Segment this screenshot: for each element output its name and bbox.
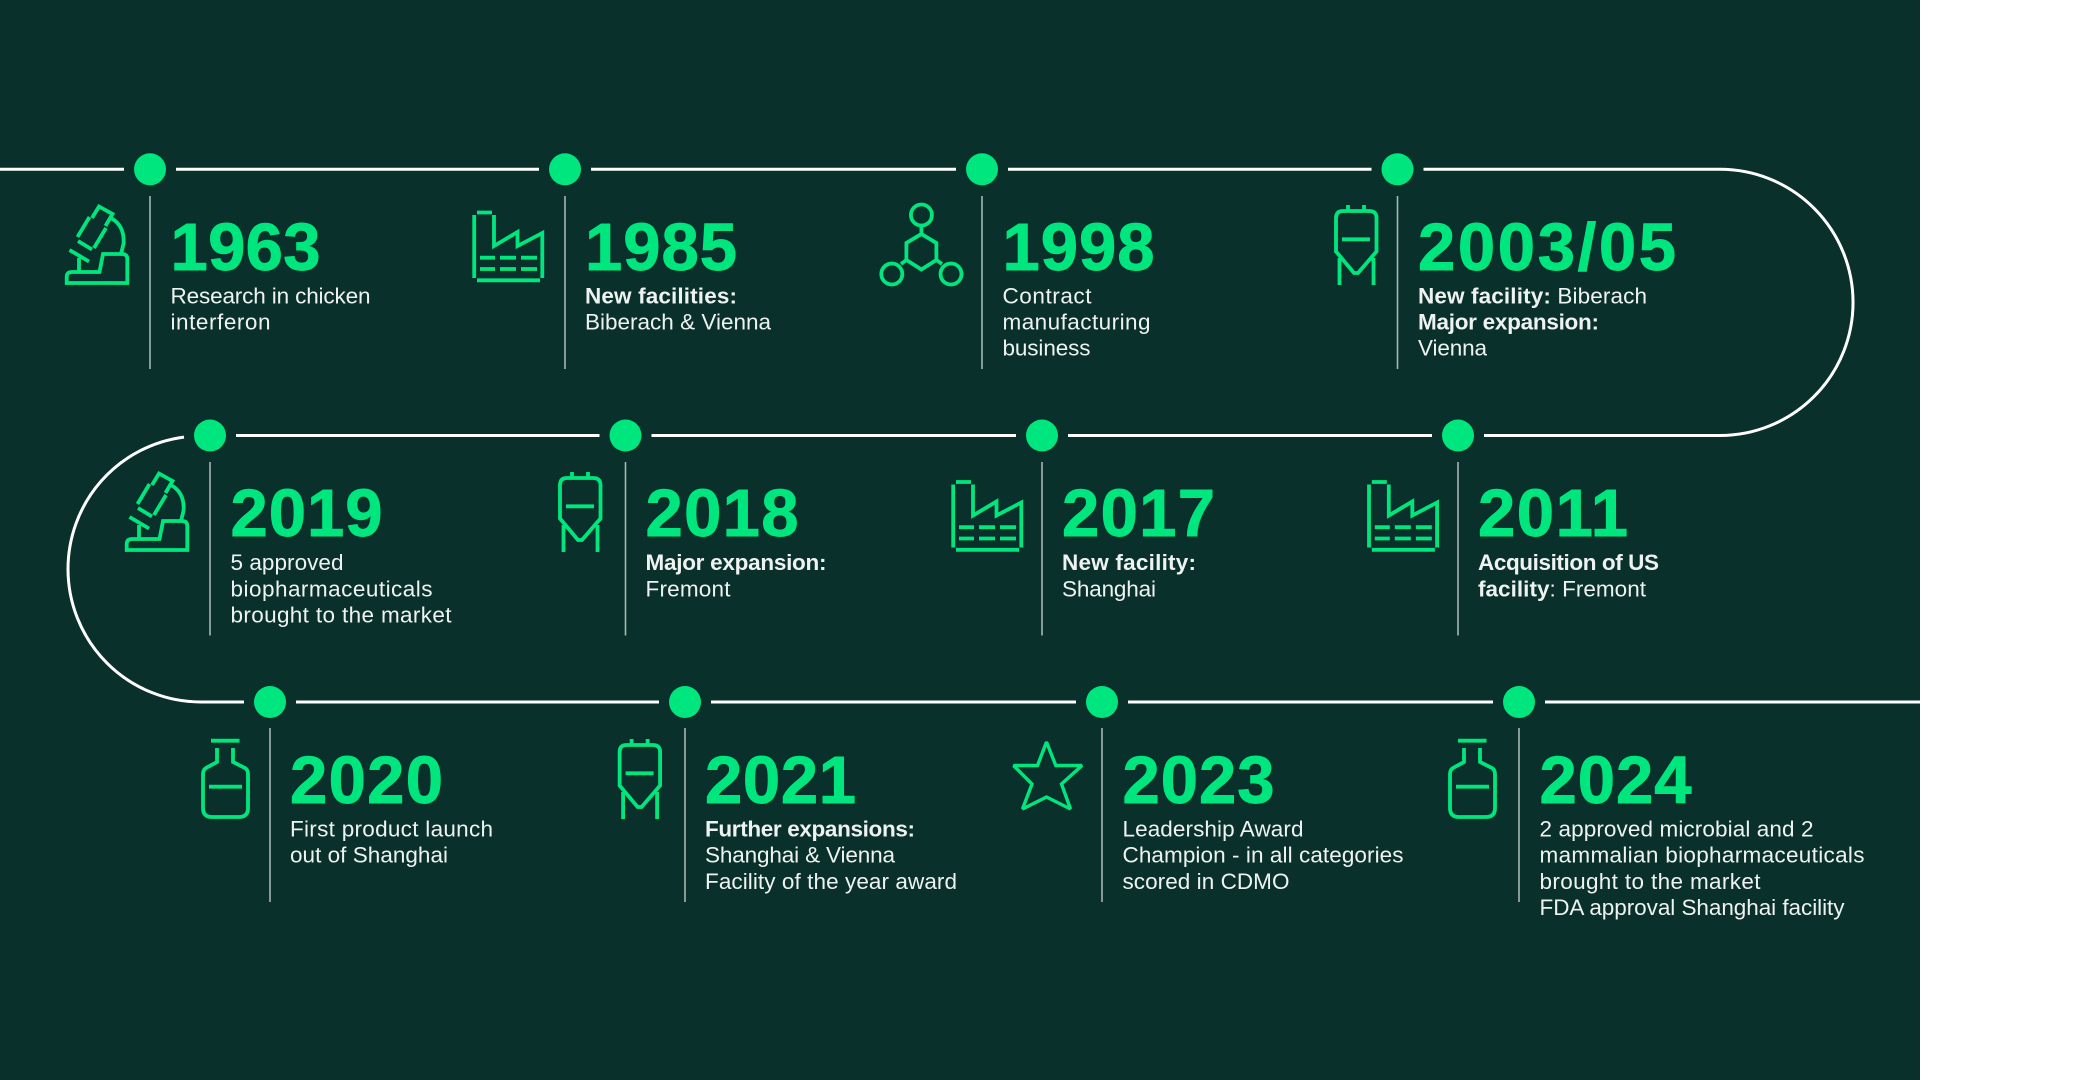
year: 1998 bbox=[1002, 210, 1154, 285]
description bbox=[170, 283, 370, 334]
year: 2003/05 bbox=[1418, 210, 1676, 285]
year: 1963 bbox=[170, 210, 320, 285]
year: 1985 bbox=[585, 210, 737, 285]
description: Shanghai bbox=[1062, 576, 1156, 601]
description: Vienna bbox=[1418, 336, 1487, 361]
description: New facility: Biberach bbox=[1418, 283, 1647, 308]
description: Champion - in all categories bbox=[1122, 843, 1404, 868]
description: Research in chicken bbox=[170, 283, 370, 308]
description: New facilities: bbox=[585, 283, 737, 308]
description bbox=[646, 550, 826, 601]
icon: microscope bbox=[127, 474, 187, 550]
year: 2018 bbox=[646, 476, 798, 551]
milestone 2011 bbox=[1369, 420, 1659, 636]
milestone 1963 bbox=[67, 153, 370, 369]
marker dot bbox=[1382, 153, 1414, 185]
description: brought to the market bbox=[1540, 869, 1761, 894]
divider bbox=[1396, 196, 1398, 369]
icon: factory bbox=[953, 482, 1021, 550]
year: 2020 bbox=[290, 743, 443, 818]
description: Acquisition of US bbox=[1478, 550, 1659, 575]
milestone 1985 bbox=[474, 153, 771, 369]
serpentine timeline path bbox=[0, 169, 1920, 702]
description: brought to the market bbox=[230, 602, 452, 628]
description: Shanghai & Vienna bbox=[705, 843, 895, 868]
divider bbox=[624, 462, 626, 636]
milestone 2017 bbox=[953, 420, 1215, 636]
description: Contract bbox=[1002, 283, 1092, 308]
marker dot bbox=[194, 420, 226, 452]
icon: bottle bbox=[203, 741, 248, 817]
marker dot bbox=[1026, 420, 1058, 452]
milestone 1998 bbox=[881, 153, 1154, 369]
divider bbox=[1457, 462, 1459, 636]
description bbox=[290, 816, 493, 868]
icon: tank bbox=[620, 739, 660, 819]
divider bbox=[1518, 728, 1520, 902]
milestone 2019 bbox=[127, 420, 452, 636]
year: 2024 bbox=[1540, 743, 1692, 818]
milestone 2021 bbox=[620, 686, 957, 902]
year: 2011 bbox=[1478, 476, 1628, 551]
year: 2021 bbox=[705, 743, 856, 818]
description: New facility: bbox=[1062, 550, 1196, 575]
marker dot bbox=[1503, 686, 1535, 718]
description: business bbox=[1002, 336, 1090, 361]
description: Further expansions: bbox=[705, 816, 915, 842]
divider bbox=[564, 196, 566, 369]
icon: star bbox=[1014, 742, 1082, 809]
icon: bottle bbox=[1450, 741, 1495, 817]
marker dot bbox=[254, 686, 286, 718]
description: 5 approved bbox=[230, 550, 344, 575]
divider bbox=[981, 196, 983, 369]
description bbox=[1540, 816, 1864, 920]
marker dot bbox=[1086, 686, 1118, 718]
marker dot bbox=[669, 686, 701, 718]
description: Major expansion: bbox=[646, 550, 826, 575]
icon: factory bbox=[1369, 482, 1437, 550]
description: interferon bbox=[170, 310, 270, 334]
icon: tank bbox=[560, 472, 600, 552]
year: 2019 bbox=[230, 476, 382, 551]
description bbox=[1122, 816, 1404, 894]
description: out of Shanghai bbox=[290, 843, 448, 868]
milestone 2020 bbox=[203, 686, 493, 902]
milestone 2023 bbox=[1014, 686, 1404, 902]
description: Major expansion: bbox=[1418, 310, 1599, 334]
marker dot bbox=[1442, 420, 1474, 452]
divider bbox=[1101, 728, 1103, 902]
description bbox=[585, 283, 771, 334]
description: scored in CDMO bbox=[1122, 869, 1290, 894]
divider bbox=[149, 196, 151, 369]
marker dot bbox=[610, 420, 642, 452]
milestone 2024 bbox=[1450, 686, 1864, 920]
description bbox=[230, 550, 452, 628]
icon: microscope bbox=[67, 206, 127, 283]
description bbox=[1478, 550, 1659, 601]
description: First product launch bbox=[290, 816, 493, 842]
marker dot bbox=[134, 153, 166, 185]
divider bbox=[684, 728, 686, 902]
description: manufacturing bbox=[1002, 310, 1150, 334]
icon: factory bbox=[474, 212, 542, 280]
description: Leadership Award bbox=[1122, 816, 1304, 842]
description: 2 approved microbial and 2 bbox=[1540, 816, 1814, 842]
year: 2023 bbox=[1122, 743, 1274, 818]
marker dot bbox=[549, 153, 581, 185]
description: Biberach & Vienna bbox=[585, 310, 771, 334]
marker dot bbox=[966, 153, 998, 185]
icon: tank bbox=[1336, 205, 1376, 285]
description: Facility of the year award bbox=[705, 869, 957, 894]
description: Fremont bbox=[646, 576, 731, 601]
description bbox=[705, 816, 957, 894]
milestone 2018 bbox=[560, 420, 826, 636]
description bbox=[1062, 550, 1196, 601]
divider bbox=[209, 462, 211, 636]
year: 2017 bbox=[1062, 476, 1215, 551]
description bbox=[1418, 283, 1647, 361]
divider bbox=[269, 728, 271, 902]
description: facility: Fremont bbox=[1478, 576, 1647, 601]
description bbox=[1002, 283, 1150, 361]
description: FDA approval Shanghai facility bbox=[1540, 895, 1845, 920]
description: biopharmaceuticals bbox=[230, 576, 432, 601]
milestone 2003/05 bbox=[1336, 153, 1676, 369]
description: mammalian biopharmaceuticals bbox=[1540, 843, 1864, 868]
icon: molecule bbox=[881, 204, 962, 284]
divider bbox=[1041, 462, 1043, 636]
